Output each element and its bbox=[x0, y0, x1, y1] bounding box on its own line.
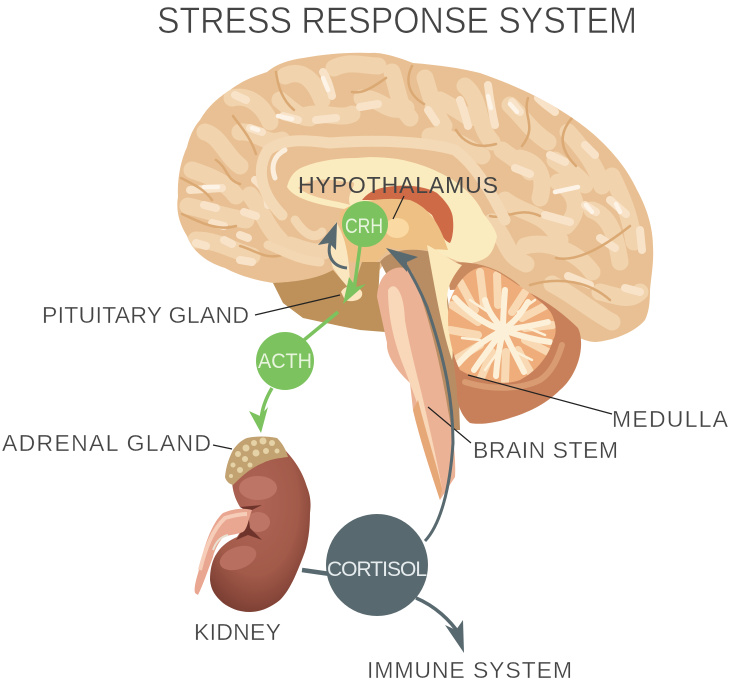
thalamus bbox=[340, 199, 448, 262]
label: medulla: MEDULLA bbox=[612, 406, 729, 432]
hormone circle: cortisol bbox=[326, 514, 428, 616]
corpus callosum bbox=[287, 157, 497, 263]
midbrain tan bbox=[273, 262, 385, 332]
hormone circle: ACTH bbox=[256, 332, 314, 390]
kidney body bbox=[210, 445, 311, 612]
dark gap above cerebellum bbox=[445, 262, 520, 290]
cerebellum arbor bbox=[448, 267, 556, 383]
gyri highlights bbox=[204, 78, 620, 212]
arrow: cortisol to hypothalamus bbox=[386, 248, 453, 541]
hormone circle: ACTH: ACTH bbox=[258, 350, 312, 373]
arrow: pituitary to ACTH bbox=[304, 312, 338, 340]
label: kidney: KIDNEY bbox=[194, 619, 281, 645]
leader line: hypothalamus bbox=[393, 196, 404, 219]
illustration: brain bbox=[177, 53, 653, 500]
groove accents bbox=[181, 66, 630, 300]
arrow: feedback to cortex bbox=[318, 222, 347, 268]
arrow: ACTH to adrenal gland bbox=[249, 388, 272, 433]
label: hypothalamus: HYPOTHALAMUS bbox=[298, 172, 498, 198]
illustration: kidney with adrenal gland bbox=[195, 436, 311, 612]
hormone circle: cortisol: CORTISOL bbox=[327, 558, 427, 581]
leader line: medulla bbox=[468, 375, 612, 414]
cream medullary ribbon bbox=[427, 245, 462, 360]
pituitary gland bbox=[341, 286, 362, 301]
adrenal gland bbox=[225, 436, 288, 485]
cerebrum bbox=[177, 53, 653, 342]
orbital gyri bbox=[268, 220, 322, 262]
leader line: adrenal gland bbox=[213, 445, 232, 449]
arrow: CRH to pituitary bbox=[343, 246, 366, 304]
pons bbox=[380, 250, 460, 430]
optic area bbox=[329, 222, 350, 292]
hypothalamus blob bbox=[385, 218, 409, 238]
label: brain stem: BRAIN STEM bbox=[473, 437, 618, 463]
gyri mid tone bbox=[188, 64, 640, 322]
fornix red band bbox=[362, 186, 453, 243]
label: adrenal gland: ADRENAL GLAND bbox=[2, 430, 211, 456]
label: pituitary gland: PITUITARY GLAND bbox=[42, 302, 249, 328]
ureter bbox=[195, 509, 252, 595]
connector: kidney to cortisol bbox=[302, 570, 330, 574]
cerebellum lower foliage shading bbox=[465, 345, 562, 388]
label: immune system: IMMUNE SYSTEM bbox=[367, 657, 572, 683]
title: STRESS RESPONSE SYSTEM bbox=[157, 0, 637, 41]
cingulate gyrus bbox=[261, 141, 505, 220]
hormone circle: CRH: CRH bbox=[345, 215, 383, 238]
hormone circle: CRH bbox=[342, 201, 388, 247]
cerebellum lobe outer bbox=[452, 293, 581, 424]
leader line: brain stem bbox=[428, 407, 471, 443]
gyri light bbox=[190, 72, 642, 292]
leader line: pituitary gland bbox=[255, 295, 340, 315]
brain stem bbox=[377, 268, 455, 500]
arrow: cortisol to immune system bbox=[416, 598, 464, 653]
